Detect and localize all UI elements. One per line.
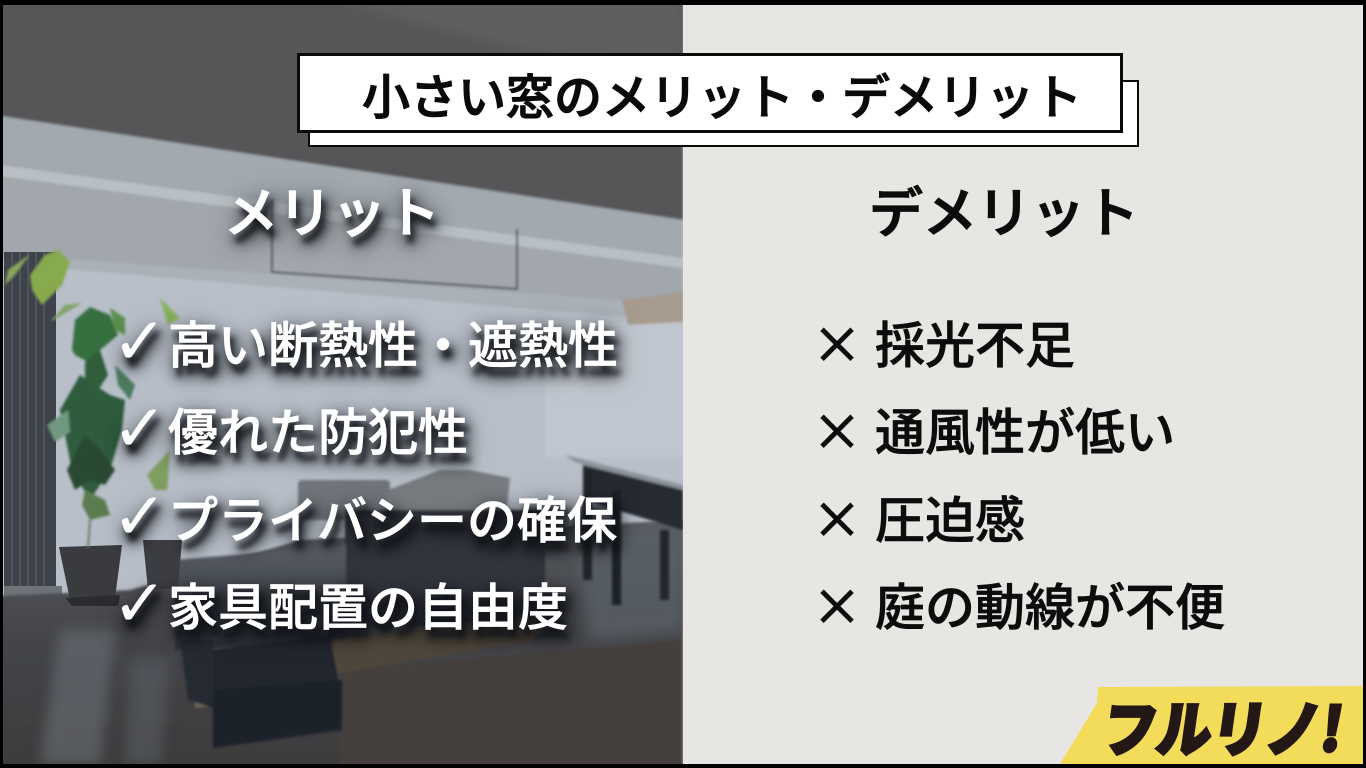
merit mark 3: ✓ — [112, 478, 167, 555]
title front plate with heading: 小さい窓のメリット・デメリット — [362, 58, 1082, 128]
heading: merits: メリット — [224, 169, 440, 248]
dining table — [565, 455, 683, 605]
title back plate — [308, 80, 1139, 147]
demerit text 1: 採光不足 — [875, 306, 1075, 378]
panel: photo background (merits) — [3, 5, 683, 764]
title box — [297, 53, 1139, 147]
sofa and ottoman — [175, 470, 545, 748]
demerit mark 3: × — [812, 481, 862, 553]
demerits list — [812, 306, 1225, 640]
merit text 4: 家具配置の自由度 — [168, 568, 568, 640]
demerit text 2: 通風性が低い — [875, 393, 1175, 465]
merits list — [112, 303, 633, 648]
floor reflections — [40, 530, 683, 764]
demerit mark 4: × — [812, 568, 862, 640]
plant and pots — [5, 250, 182, 606]
merit text 3: プライバシーの確保 — [168, 481, 617, 553]
panel: demerits background — [683, 5, 1363, 764]
logo: yellow tag — [1060, 682, 1363, 768]
demerit text 3: 圧迫感 — [875, 481, 1025, 553]
merit mark 4: ✓ — [112, 565, 167, 642]
demerit mark 1: × — [812, 306, 862, 378]
curtain — [4, 252, 62, 598]
demerit mark 2: × — [812, 393, 862, 465]
merit mark 1: ✓ — [112, 303, 167, 380]
heading: demerits: デメリット — [869, 169, 1139, 248]
floor — [0, 520, 683, 768]
demerit text 4: 庭の動線が不便 — [875, 568, 1225, 640]
merit mark 2: ✓ — [112, 390, 167, 467]
merit text 1: 高い断熱性・遮熱性 — [168, 306, 618, 378]
merit text 2: 優れた防犯性 — [168, 393, 468, 465]
